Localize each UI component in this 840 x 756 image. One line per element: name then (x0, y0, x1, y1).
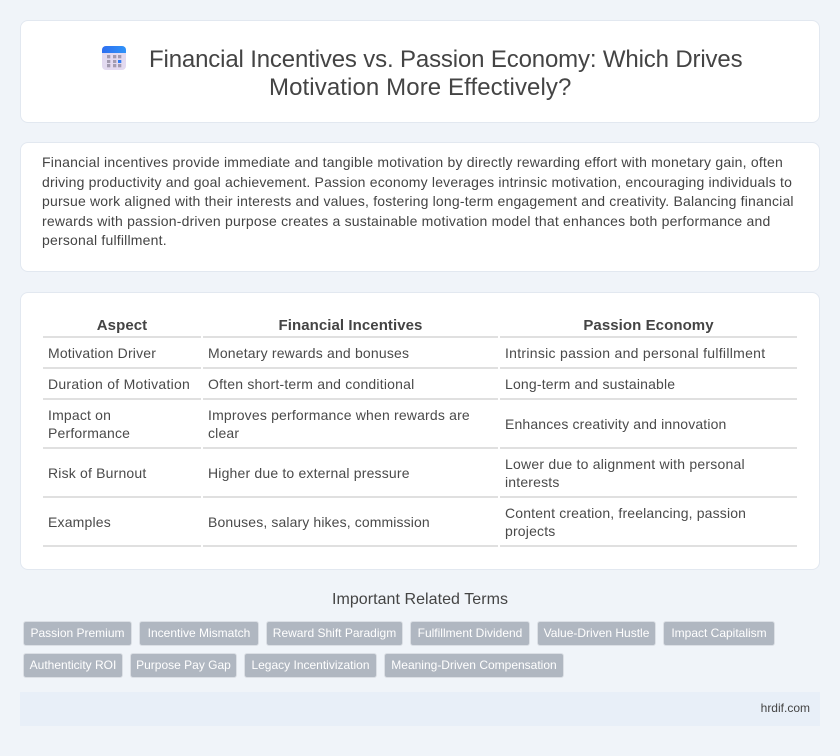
comparison table: Financial Incentives (279, 317, 422, 334)
title: Motivation More Effectively? (269, 74, 571, 101)
comparison table: Monetary rewards and bonuses (208, 345, 409, 361)
comparison table: Often short-term and conditional (208, 376, 414, 392)
comparison table: Enhances creativity and innovation (505, 416, 726, 432)
related terms tags: Purpose Pay Gap (136, 658, 231, 672)
related terms tags: Reward Shift Paradigm (273, 626, 396, 640)
summary text: personal fulfillment. (42, 232, 167, 248)
comparison table: Long-term and sustainable (505, 376, 675, 392)
summary panel (20, 142, 820, 272)
related terms tags: Incentive Mismatch (148, 626, 250, 640)
summary text: driving productivity and goal achievement. Passion economy leverages intrinsic motivation, encouraging individuals to (42, 174, 792, 190)
related terms tags: Meaning-Driven Compensation (391, 658, 557, 672)
related terms tags: Authenticity ROI (30, 658, 116, 672)
footer bar (20, 692, 820, 726)
comparison table: interests (505, 474, 560, 490)
comparison table: Duration of Motivation (48, 376, 190, 392)
comparison table: Risk of Burnout (48, 465, 146, 481)
summary text (42, 154, 794, 248)
comparison table: Lower due to alignment with personal (505, 456, 745, 472)
related terms tags: Passion Premium (30, 626, 125, 640)
related terms heading: Important Related Terms (332, 591, 508, 608)
comparison table: Examples (48, 514, 111, 530)
related terms tags: Fulfillment Dividend (418, 626, 522, 640)
comparison table: Impact on (48, 407, 111, 423)
icon: calendar (102, 46, 126, 70)
title: Financial Incentives vs. Passion Economy: Which Drives (149, 46, 742, 73)
comparison table: Higher due to external pressure (208, 465, 410, 481)
related terms tags: Value-Driven Hustle (544, 626, 649, 640)
table panel (20, 292, 820, 570)
comparison table: Content creation, freelancing, passion (505, 505, 746, 521)
comparison table: Motivation Driver (48, 345, 156, 361)
comparison table (43, 317, 797, 547)
comparison table: projects (505, 523, 555, 539)
comparison table: Passion Economy (583, 317, 714, 334)
comparison table: Improves performance when rewards are (208, 407, 470, 423)
related terms tags: Legacy Incentivization (251, 658, 370, 672)
comparison table: Bonuses, salary hikes, commission (208, 514, 430, 530)
summary text: pursue work aligned with their interests and values, fostering long-term engagement and creativity. Balancing financial (42, 193, 794, 209)
comparison table: Intrinsic passion and personal fulfillment (505, 345, 765, 361)
comparison table: Performance (48, 425, 130, 441)
summary text: rewards with passion-driven purpose creates a sustainable motivation model that enhances both performance and (42, 213, 770, 229)
summary text: Financial incentives provide immediate and tangible motivation by directly rewarding effort with monetary gain, often (42, 154, 783, 170)
related terms tags: Impact Capitalism (671, 626, 767, 640)
source label: hrdif.com (761, 701, 810, 715)
related terms tags (23, 621, 775, 678)
header panel (20, 20, 820, 123)
comparison table: clear (208, 425, 239, 441)
comparison table: Aspect (97, 317, 147, 334)
title (149, 46, 742, 101)
